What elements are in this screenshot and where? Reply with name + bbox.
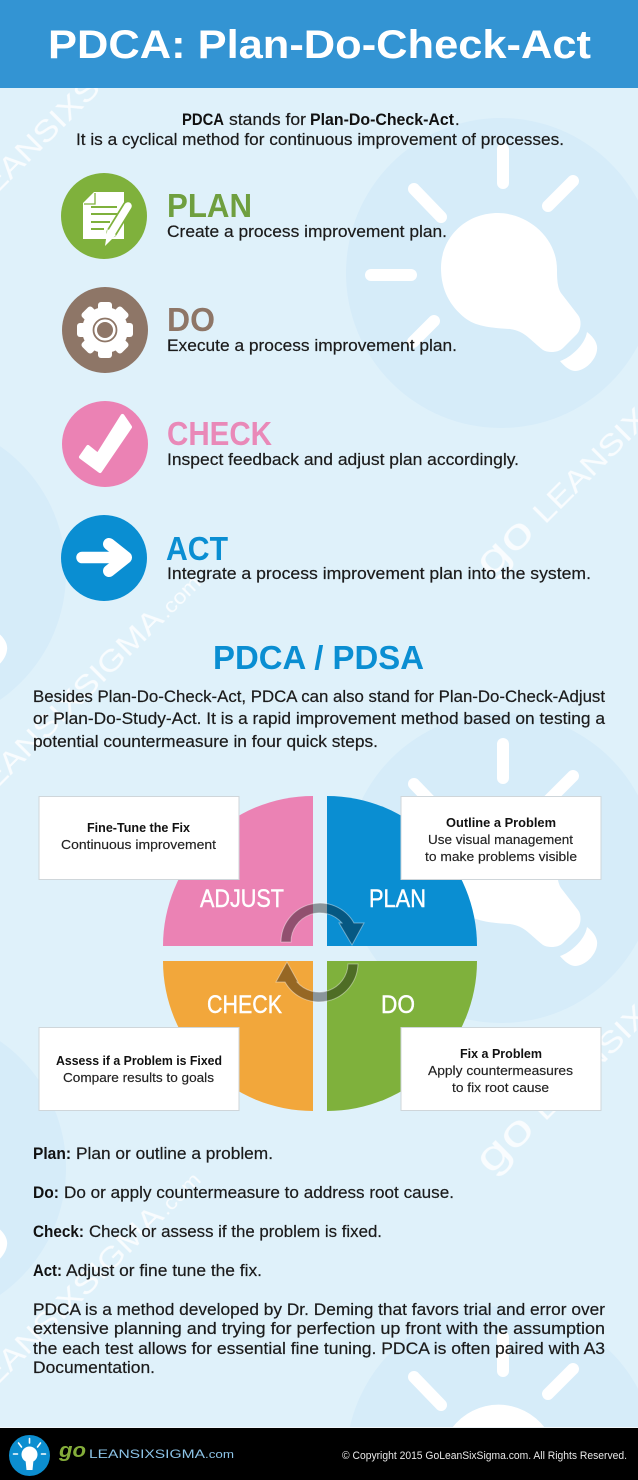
definitions list: Do: [33,1184,59,1202]
callout: outline a problem: Use visual management [428,832,573,847]
definitions list: Do or apply countermeasure to address root cause. [64,1184,454,1202]
definitions list: Plan: [33,1145,71,1163]
intro text: It is a cyclical method for continuous improvement of processes. [76,131,564,149]
callout: fix a problem [401,1028,601,1110]
PDCA PDSA paragraph [33,688,606,751]
callout: fine-tune the fix [39,796,239,880]
callout: fix a problem: Apply countermeasures [428,1063,574,1078]
callout: fix a problem: to fix root cause [452,1080,549,1095]
panel: plan step [61,173,447,259]
heading: plan: PLAN [167,187,252,224]
callout: fix a problem: Fix a Problem [460,1046,542,1061]
intro text: . [455,111,460,129]
closing paragraph: PDCA is a method developed by Dr. Deming that favors trial and error over [33,1301,606,1319]
callout: fine-tune the fix: Fine-Tune the Fix [87,820,191,835]
heading: check: CHECK [167,415,272,452]
logo wordmark: go [58,1440,86,1462]
icon: arrow [61,515,147,601]
callout: outline a problem: Outline a Problem [446,815,556,830]
logo wordmark: .com [205,1449,234,1461]
intro text: stands for [229,111,307,129]
callout: outline a problem: to make problems visible [425,849,577,864]
icon: document and pencil [61,173,147,259]
do description: Execute a process improvement plan. [167,337,457,355]
definitions list: Adjust or fine tune the fix. [66,1262,262,1280]
quadrant: check [163,961,313,1111]
panel: do step [62,287,457,373]
icon: check mark [62,401,148,487]
background text watermarks: .com [155,1169,206,1220]
intro text: Plan-Do-Check-Act [310,111,454,129]
closing paragraph [33,1301,606,1377]
definitions list: Plan or outline a problem. [76,1145,273,1163]
logo wordmark [58,1440,234,1462]
quadrant: check: CHECK [207,991,282,1019]
callout: assess if a problem is fixed: Assess if a Problem is Fixed [56,1053,222,1068]
check description: Inspect feedback and adjust plan accordingly. [167,451,519,469]
background text watermarks: go [464,1104,543,1182]
closing paragraph: the each test allows for essential fine tuning. PDCA is often paired with A3 [33,1340,605,1358]
quadrant: plan: PLAN [369,885,426,913]
icon: logo lightbulb [9,1435,50,1476]
panel: act step [61,515,591,601]
quadrant: plan [327,796,477,946]
heading: PDCA / PDSA: PDCA / PDSA [213,639,424,676]
definitions list: Check: [33,1223,84,1241]
copyright: © Copyright 2015 GoLeanSixSigma.com. All Rights Reserved. [342,1450,627,1462]
callout: assess if a problem is fixed: Compare results to goals [63,1070,215,1085]
definitions list: Act: [33,1262,62,1280]
PDCA PDSA paragraph: or Plan-Do-Study-Act. It is a rapid improvement method based on testing a [33,710,606,728]
heading: act: ACT [166,530,228,567]
definitions list [33,1145,454,1280]
closing paragraph: extensive planning and trying for perfection up front with the assumption [33,1320,605,1338]
chart: PDCA cycle diagram [39,796,601,1111]
definitions list: Check or assess if the problem is fixed. [89,1223,382,1241]
callout: outline a problem [401,796,601,880]
logo wordmark: LEANSIXSIGMA [89,1447,205,1461]
quadrant: adjust [163,796,313,946]
plan description: Create a process improvement plan. [167,223,447,241]
arrow: bottom clockwise [276,962,358,1002]
background text watermarks: .com [155,572,206,623]
PDCA PDSA paragraph: potential countermeasure in four quick steps. [33,733,378,751]
quadrant: do [327,961,477,1111]
callout: fine-tune the fix: Continuous improvement [61,837,216,852]
quadrant: do: DO [381,991,415,1019]
intro text: PDCA [182,111,224,129]
arrow: top clockwise [281,903,364,945]
closing paragraph: Documentation. [33,1359,155,1377]
icon: gear [62,287,148,373]
title: PDCA: Plan-Do-Check-Act [48,23,591,67]
background text watermarks: go [464,507,543,585]
heading: do: DO [167,301,215,338]
header banner [0,0,638,88]
panel: check step [62,401,519,487]
footer [0,1427,638,1480]
quadrant: adjust: ADJUST [200,885,284,913]
act description: Integrate a process improvement plan into the system. [167,565,591,583]
callout: assess if a problem is fixed [39,1028,239,1110]
PDCA PDSA paragraph: Besides Plan-Do-Check-Act, PDCA can also stand for Plan-Do-Check-Adjust [33,688,605,706]
intro text [76,111,564,149]
